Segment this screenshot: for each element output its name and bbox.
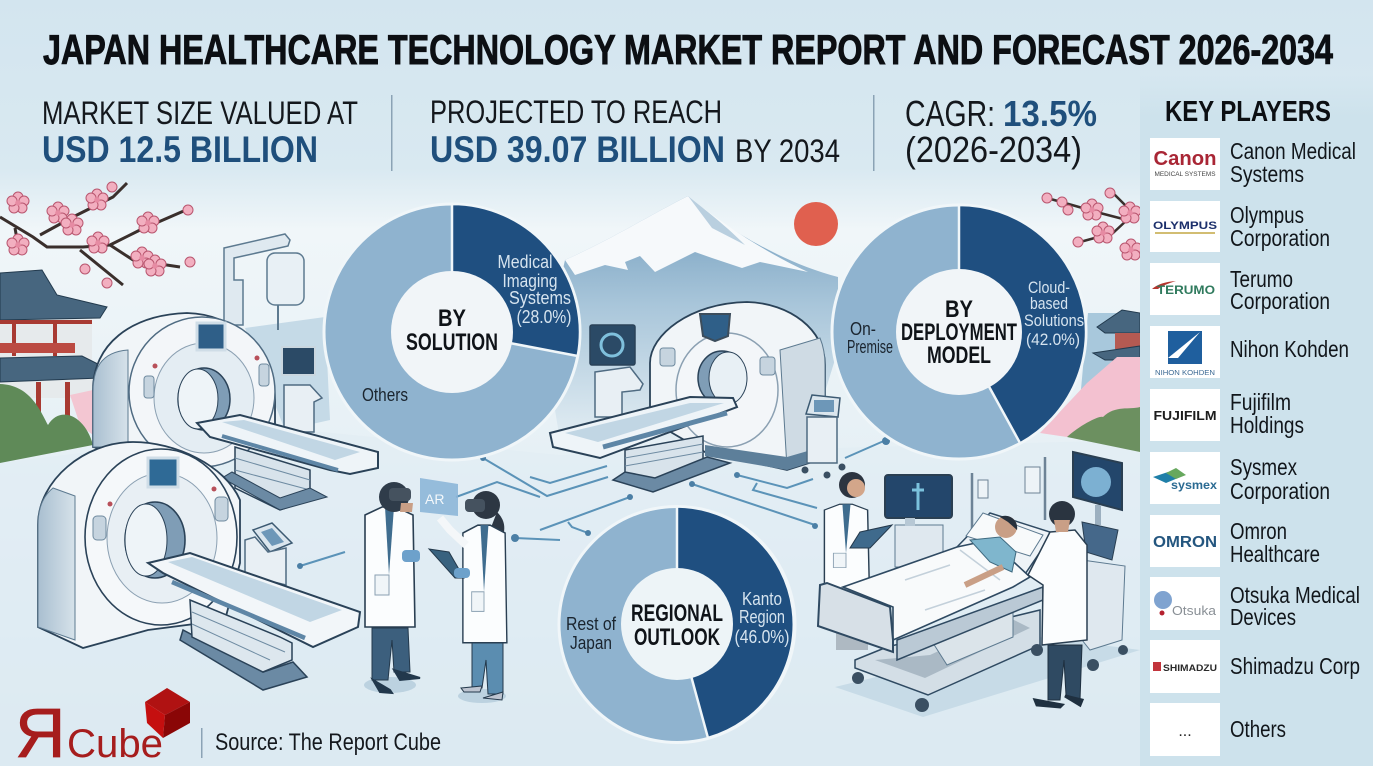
illustration: doctor at bed	[1028, 501, 1087, 707]
chart: regional outlook donut: REGIONAL	[631, 600, 723, 627]
chart: by deployment model donut	[832, 205, 1086, 459]
player: Sysmex: Corporation	[1230, 478, 1330, 504]
illustration: doctor with headset, left	[364, 482, 420, 693]
logo: RCube: Cube	[67, 722, 163, 766]
chart: by deployment model donut: DEPLOYMENT	[901, 319, 1017, 346]
scenery: temple left	[0, 270, 107, 463]
scenery: cherry branch left	[0, 182, 195, 288]
player: Omron: OMRON	[1153, 534, 1217, 551]
illustration: patient bed scene	[818, 452, 1140, 717]
stat: market size	[42, 95, 358, 170]
player: Others: Others	[1230, 716, 1286, 742]
stat: CAGR: (2026-2034)	[905, 129, 1082, 170]
player: Others: ...	[1178, 723, 1192, 740]
illustration: central CT scanner	[550, 302, 846, 492]
chart: regional outlook donut: Kanto	[742, 589, 782, 609]
stat: projected value: PROJECTED TO REACH	[430, 94, 722, 130]
chart: regional outlook donut: (46.0%)	[734, 627, 790, 647]
connector lines	[297, 437, 890, 569]
scenery: cherry branch, temple and trees right	[1040, 188, 1142, 452]
lower ground	[0, 428, 1140, 766]
player: Omron: Healthcare	[1230, 541, 1320, 567]
logo: RCube	[15, 688, 190, 766]
console	[245, 523, 292, 585]
stat: CAGR: 13.5%	[1003, 93, 1097, 134]
chart: by deployment model donut: Premise	[847, 337, 893, 357]
player: Fujifilm	[1150, 389, 1304, 441]
chart: by solution donut: Systems	[509, 288, 571, 308]
player: Terumo	[1150, 263, 1330, 315]
panel: key players	[1140, 75, 1373, 766]
player: Otsuka: Otsuka	[1172, 603, 1217, 618]
player: Canon: MEDICAL SYSTEMS	[1154, 172, 1216, 178]
chart: by deployment model donut: Cloud-	[1028, 278, 1070, 297]
player: Omron	[1150, 515, 1320, 567]
nurse with tablet	[824, 472, 892, 650]
illustration: upper left CT scanner	[93, 313, 378, 510]
player: Sysmex: sysmex	[1171, 478, 1217, 492]
chart: regional outlook donut: Rest of	[566, 614, 617, 634]
chart: regional outlook donut: OUTLOOK	[634, 624, 720, 651]
player: Olympus: OLYMPUS	[1153, 220, 1217, 232]
chart: regional outlook donut: Region	[739, 607, 785, 627]
chart: regional outlook donut	[559, 506, 795, 742]
source: Source: The Report Cube	[215, 729, 441, 756]
player: Nihon Kohden: NIHON KOHDEN	[1155, 370, 1215, 377]
chart: by solution donut	[324, 204, 580, 460]
illustration: doctor with headset and clipboard, right	[429, 491, 507, 703]
player: Sysmex: Sysmex	[1230, 454, 1297, 480]
player: Shimadzu: SHIMADZU	[1163, 663, 1217, 673]
stat: CAGR: CAGR:	[905, 93, 995, 134]
player: Canon	[1150, 138, 1356, 190]
illustration: AR hologram panel	[420, 478, 458, 516]
player: Sysmex	[1150, 452, 1330, 504]
stat: projected value	[430, 94, 840, 170]
stat: market size: MARKET SIZE VALUED AT	[42, 95, 358, 131]
player: Terumo: TERUMO	[1157, 283, 1215, 297]
scenery: Mount Fuji and hills	[245, 196, 838, 440]
chart: by deployment model donut: MODEL	[927, 342, 991, 369]
stat: projected value: USD 39.07 BILLION	[430, 129, 725, 170]
chart: by solution donut: Others	[362, 385, 408, 405]
player: Omron: Omron	[1230, 518, 1287, 544]
player: Canon: Systems	[1230, 161, 1304, 187]
bed frame	[855, 610, 1040, 695]
chart: by solution donut: Medical	[498, 252, 552, 272]
player: Olympus	[1150, 201, 1330, 252]
chart: by solution donut: BY	[438, 305, 466, 332]
stat: projected value: BY 2034	[735, 133, 840, 169]
stat: market size: USD 12.5 BILLION	[42, 129, 318, 170]
player: Otsuka	[1150, 577, 1360, 630]
scenery: ceiling IV arm	[224, 234, 304, 330]
player: Fujifilm: FUJIFILM	[1154, 408, 1216, 423]
chart: by solution donut: SOLUTION	[406, 329, 498, 356]
chart: regional outlook donut: Japan	[570, 633, 612, 653]
illustration: lower left CT scanner	[38, 442, 360, 690]
icon: red sun	[794, 202, 838, 246]
monitor with body scan	[885, 475, 952, 567]
player: Nihon Kohden	[1150, 326, 1349, 378]
chart: by deployment model donut: based	[1030, 294, 1068, 313]
player: Others	[1150, 703, 1286, 756]
player: Fujifilm: Holdings	[1230, 412, 1304, 438]
player: Shimadzu	[1150, 640, 1360, 693]
illustration: AR hologram panel: AR	[425, 491, 444, 507]
chart: by solution donut: Imaging	[502, 271, 558, 291]
player: Terumo: Terumo	[1230, 266, 1293, 292]
player: Nihon Kohden: Nihon Kohden	[1230, 336, 1349, 362]
player: Olympus: Olympus	[1230, 202, 1304, 228]
chart: by deployment model donut: (42.0%)	[1026, 330, 1080, 349]
player: Canon: Canon	[1154, 148, 1216, 170]
chart: by deployment model donut: BY	[945, 296, 973, 323]
heading: key players: KEY PLAYERS	[1165, 96, 1331, 128]
console left	[590, 325, 643, 417]
stat: CAGR	[905, 93, 1097, 170]
player: Fujifilm: Fujifilm	[1230, 389, 1291, 415]
right monitor with scan	[1073, 452, 1125, 650]
chart: by deployment model donut: Solutions	[1024, 311, 1084, 330]
console right	[802, 395, 846, 478]
console	[282, 347, 322, 432]
chart: by solution donut: (28.0%)	[516, 307, 572, 327]
player: Olympus: Corporation	[1230, 225, 1330, 251]
player: Otsuka: Devices	[1230, 604, 1296, 630]
player: Terumo: Corporation	[1230, 288, 1330, 314]
chart: by deployment model donut: On-	[850, 319, 876, 339]
